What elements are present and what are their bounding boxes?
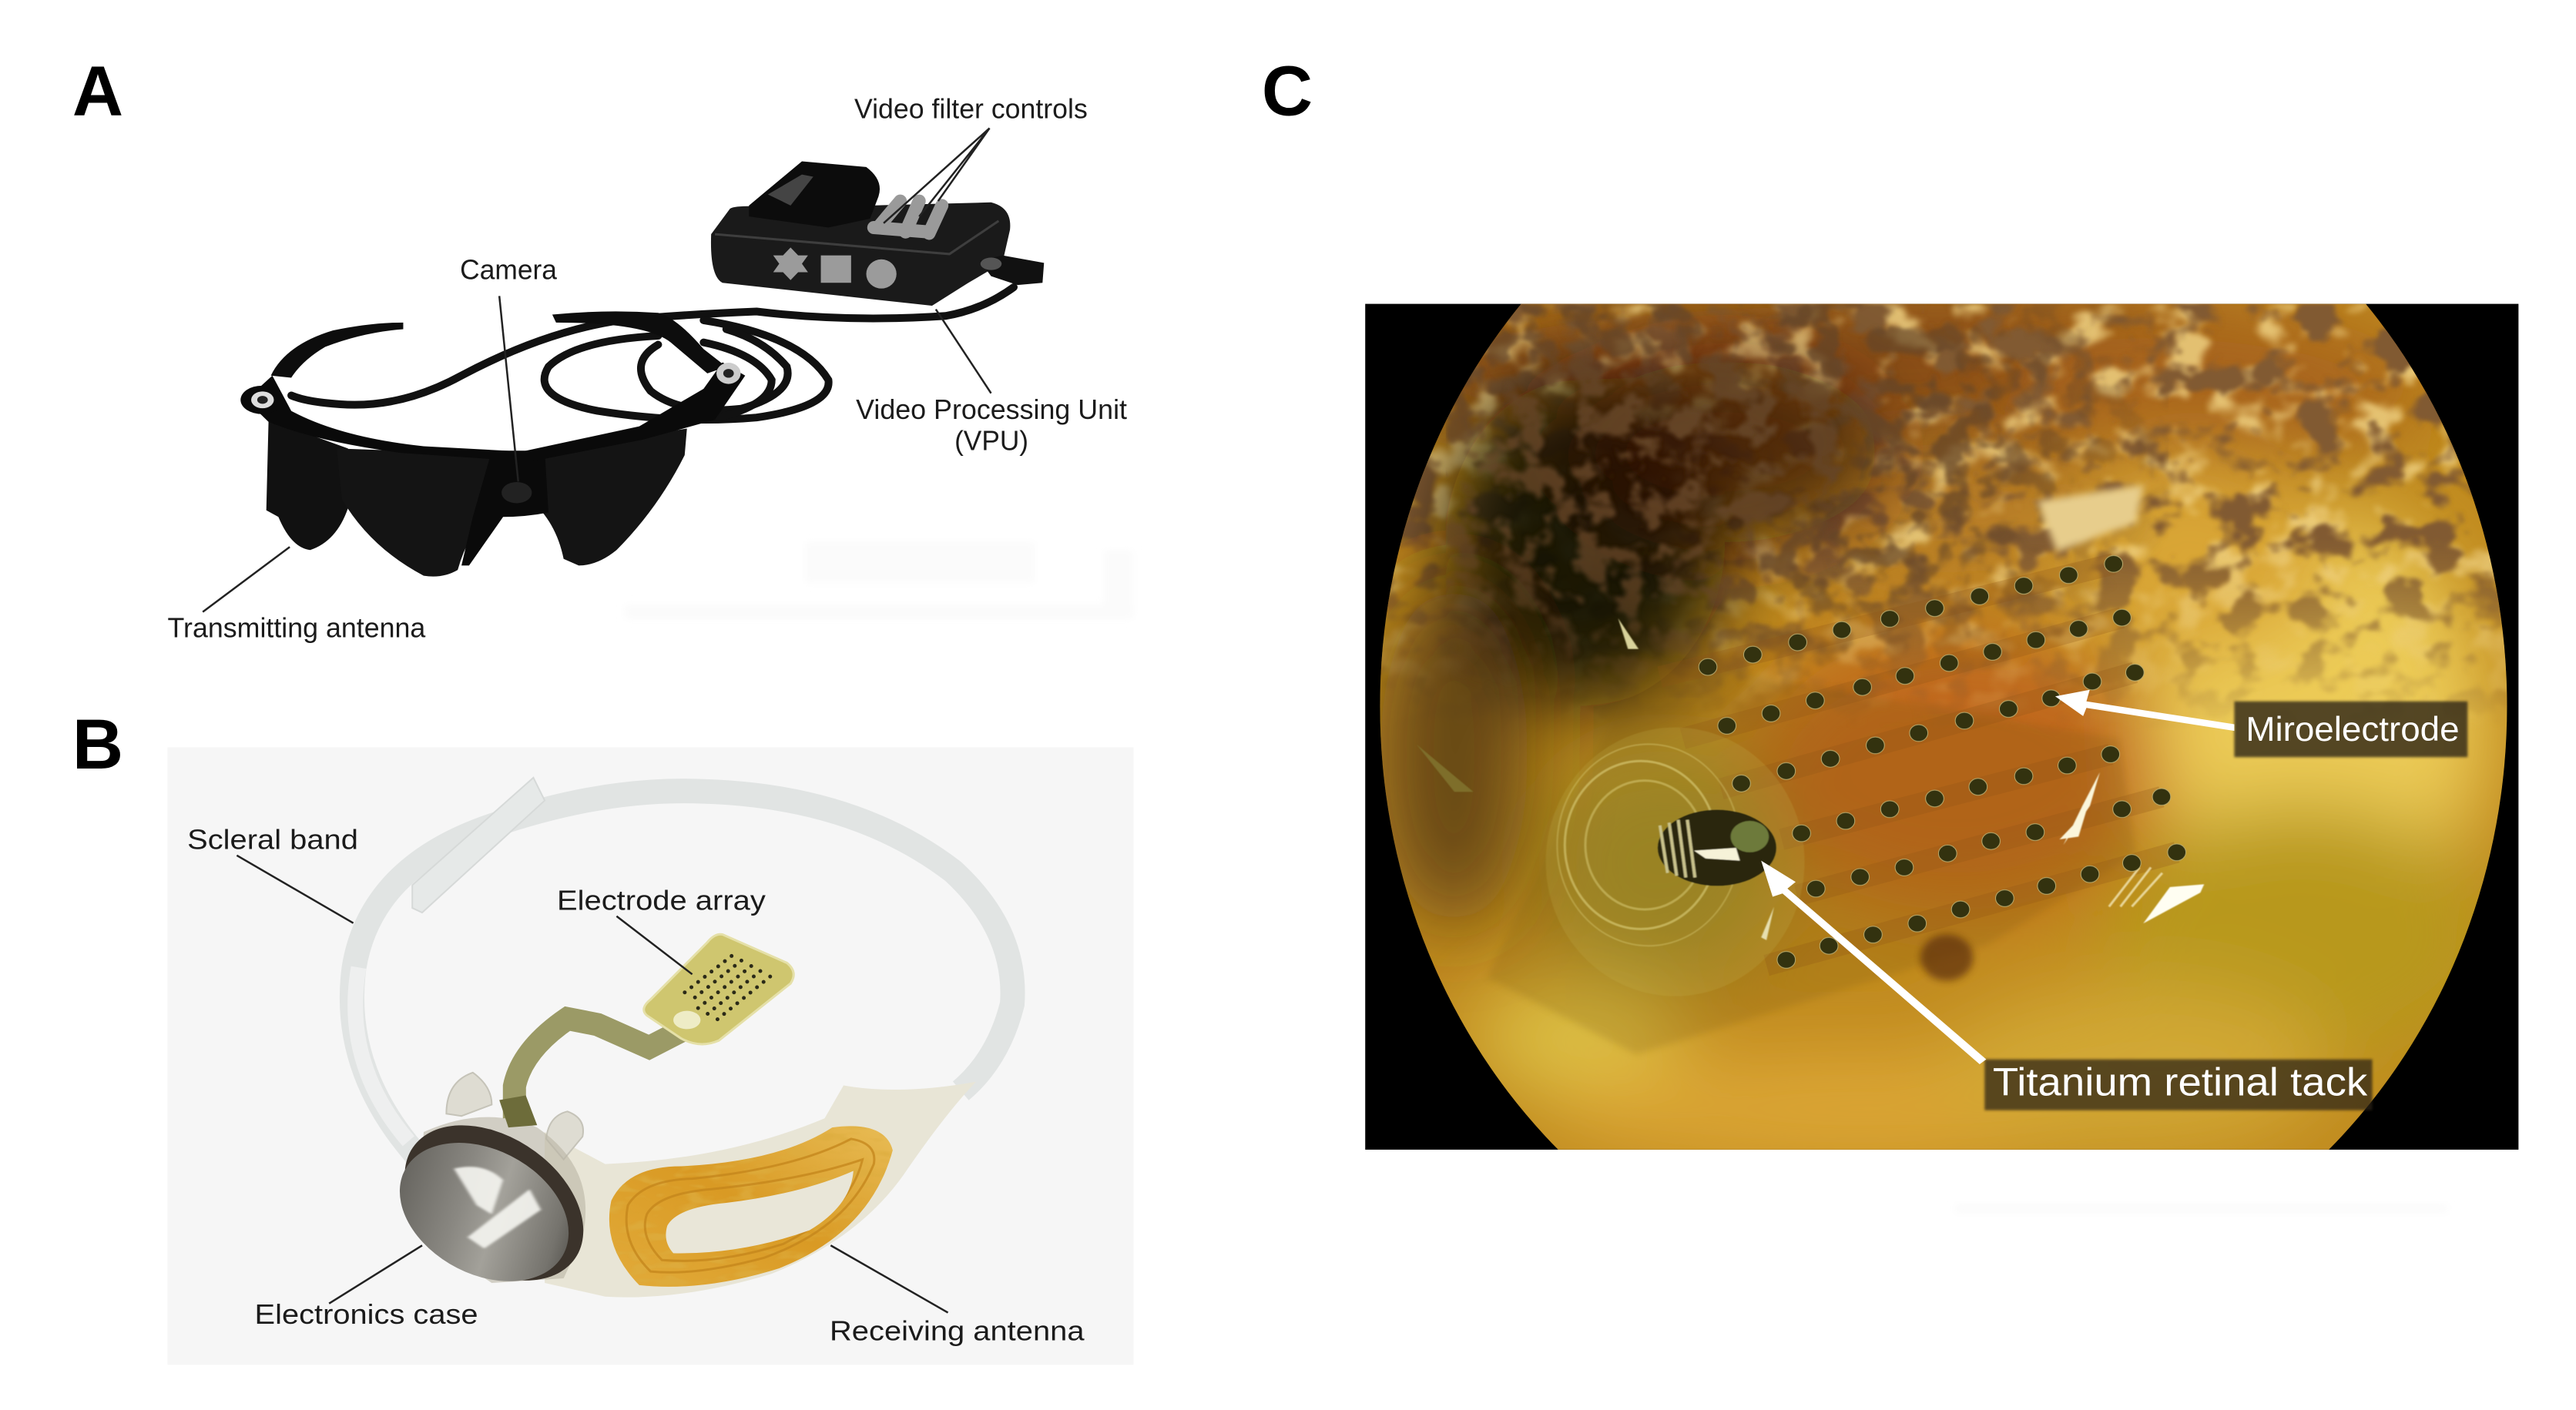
electrode ribbon xyxy=(515,1019,685,1118)
faint smudge xyxy=(624,542,1134,619)
panel A: external glasses and video processing unit xyxy=(72,52,1134,644)
label: electrode array: Electrode array xyxy=(557,885,766,916)
label: receiving antenna: Receiving antenna xyxy=(830,1315,1085,1346)
retinal tack xyxy=(1546,728,1805,996)
hinge rings xyxy=(240,363,740,414)
label: camera: Camera xyxy=(460,254,558,286)
panel C: fundus photograph xyxy=(1262,52,2518,1214)
faint smudge xyxy=(1955,1204,2448,1214)
mottled pigment xyxy=(1365,304,2518,731)
lenses xyxy=(267,420,348,550)
arrow: to titanium tack xyxy=(1761,861,1986,1064)
panel B: implanted device xyxy=(72,705,1134,1365)
label: transmitting antenna: Transmitting antenna xyxy=(168,612,426,644)
band flap xyxy=(412,778,545,913)
array strips xyxy=(1660,564,2177,966)
label backing: microelectrode xyxy=(2234,702,2467,757)
label backing: titanium tack xyxy=(1984,1060,2373,1110)
right temple xyxy=(552,311,726,373)
panel background xyxy=(168,747,1134,1365)
brow bar xyxy=(246,362,745,462)
silicone body xyxy=(545,1082,976,1298)
label: video filter controls: Video filter controls xyxy=(854,93,1088,125)
illustration: implant xyxy=(352,778,1013,1298)
heading: A: A xyxy=(72,52,123,130)
clear tabs xyxy=(446,1073,583,1160)
receiving antenna xyxy=(609,1126,893,1287)
scleral band xyxy=(352,791,1013,1155)
plate lower edge xyxy=(1487,657,2135,1054)
glare highlights xyxy=(1417,618,2204,940)
heading: C: C xyxy=(1262,52,1313,130)
fundus image xyxy=(1363,280,2518,1166)
antenna window xyxy=(666,1171,854,1253)
left temple xyxy=(271,323,403,378)
label: titanium retinal tack: Titanium retinal tack xyxy=(1993,1060,2368,1104)
label: video processing unit: Video Processing Unit xyxy=(856,394,1127,425)
electrode array pad xyxy=(644,934,793,1044)
label: scleral band: Scleral band xyxy=(187,824,358,856)
leader lines xyxy=(236,856,948,1313)
label: electronics case: Electronics case xyxy=(255,1298,478,1330)
photo background xyxy=(1365,304,2518,1150)
dark spot xyxy=(1920,935,1973,980)
illustration: video processing unit xyxy=(711,161,1044,306)
deep pigment flecks xyxy=(1446,304,2168,698)
electronics case xyxy=(370,1110,618,1296)
arrow: to microelectrode xyxy=(2055,690,2234,731)
heading: B: B xyxy=(72,705,123,784)
dark pigmented region xyxy=(1380,361,1881,928)
cable and loops xyxy=(291,287,1014,420)
label: microelectrode: Miroelectrode xyxy=(2246,710,2460,749)
label: VPU: (VPU) xyxy=(954,424,1028,456)
illustration: glasses with camera and cable xyxy=(240,287,1014,577)
microelectrode grid xyxy=(1699,555,2186,968)
camera lens xyxy=(501,482,532,503)
electrode dots xyxy=(679,956,770,1020)
leader lines xyxy=(203,128,991,612)
antenna foil texture xyxy=(609,1126,892,1278)
